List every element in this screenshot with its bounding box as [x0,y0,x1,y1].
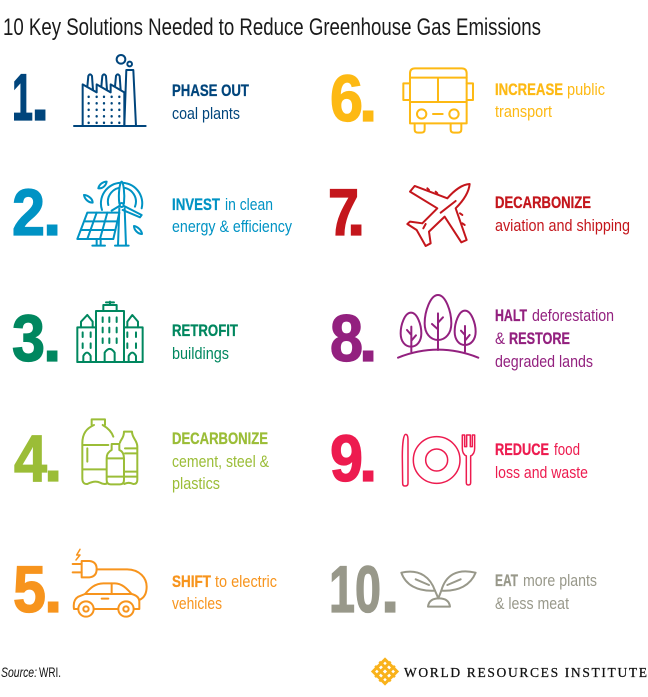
icon: plate knife and fork [402,434,475,486]
label: invest in clean energy: INVEST [172,195,220,214]
panel: solution 7 aviation and shipping [328,175,630,249]
label: increase public transport: INCREASE [495,80,563,99]
number 3: 3 [12,301,45,375]
panel: solution 9 food loss [330,421,588,495]
icon: bus [403,68,473,133]
source note: Source: [1,664,37,680]
icon: factory [74,55,146,126]
number 2: 2 [12,175,45,249]
label: phase out coal plants: coal plants [172,104,240,123]
number 1: . [31,60,49,134]
label: eat more plants and less meat: & less meat [495,594,569,613]
icon: electric car with plug [73,549,147,617]
label: halt deforestation and restore degraded lands: HALT [495,306,527,325]
label: shift to electric vehicles: to electric [215,572,277,591]
label: decarbonize aviation and shipping: DECARBONIZE [495,193,591,212]
label: decarbonize cement steel plastics: DECARBONIZE [172,429,268,448]
number 10: 10 [329,552,381,626]
number 1: 1 [12,60,33,134]
label: halt deforestation and restore degraded lands: deforestation [532,306,614,325]
icon: plastic bottles [82,419,137,484]
label: halt deforestation and restore degraded lands: RESTORE [509,329,570,348]
label: decarbonize cement steel plastics: plastics [172,474,220,493]
panel: solution 6 public transport [330,61,605,135]
number 2: . [43,175,61,249]
number 9: 9 [330,421,363,495]
label: halt deforestation and restore degraded lands: degraded lands [495,352,593,371]
panel: solution 3 retrofit buildings [12,301,238,375]
panel: solution 1 coal plants [12,55,249,134]
number 5: . [44,552,62,626]
number 6: 6 [330,61,363,135]
label: reduce food loss and waste: loss and waste [495,463,588,482]
label: halt deforestation and restore degraded lands: & [495,329,506,348]
number 5: 5 [13,552,46,626]
label: increase public transport: transport [495,102,552,121]
number 7: 7 [328,175,359,249]
logo: World Resources Institute [369,656,647,687]
number 4: . [44,421,62,495]
label: reduce food loss and waste: food [554,440,580,459]
number 3: . [43,301,61,375]
logo wordmark: WORLD RESOURCES INSTITUTE [404,665,647,680]
label: phase out coal plants: PHASE OUT [172,81,249,100]
label: increase public transport: public [567,80,605,99]
number 8: . [359,301,377,375]
panel: solution 2 clean energy [12,175,292,249]
label: shift to electric vehicles [172,572,277,613]
label: decarbonize cement steel plastics [172,429,270,493]
number 6: . [359,61,377,135]
label: shift to electric vehicles: vehicles [172,594,222,613]
icon: trees on a hill [398,295,478,358]
number 7: . [347,175,365,249]
label: eat more plants and less meat [495,571,597,613]
icon: solar panel and wind turbine [77,182,142,246]
number 8: 8 [330,301,363,375]
icon: airplane [407,184,470,246]
icon: seedling [401,571,476,607]
panel: solution 10 plants and meat [329,552,597,626]
label: invest in clean energy [172,195,292,236]
label: retrofit buildings: buildings [172,344,229,363]
icon: gold lattice emblem [369,656,401,687]
label: eat more plants and less meat: more plants [523,571,597,590]
icon: buildings [77,302,143,362]
label: shift to electric vehicles: SHIFT [172,572,211,591]
number 4: 4 [14,421,47,495]
label: decarbonize aviation and shipping [495,193,630,235]
label: retrofit buildings: RETROFIT [172,321,238,340]
panel: solution 5 electric vehicles [13,549,277,626]
label: invest in clean energy: in clean [225,195,273,214]
label: retrofit buildings [172,321,238,363]
number 9: . [359,421,377,495]
label: decarbonize cement steel plastics: cement, steel & [172,452,270,471]
label: reduce food loss and waste [495,440,588,482]
number 10: . [381,552,399,626]
label: reduce food loss and waste: REDUCE [495,440,549,459]
label: increase public transport [495,80,605,121]
label: halt deforestation and restore degraded lands [495,306,614,371]
label: invest in clean energy: energy & efficiency [172,217,292,236]
label: phase out coal plants [172,81,249,123]
panel: solution 4 cement steel plastics [14,419,270,495]
source note: WRI. [39,664,61,680]
label: eat more plants and less meat: EAT [495,571,518,590]
panel: solution 8 forests and lands [330,295,614,375]
